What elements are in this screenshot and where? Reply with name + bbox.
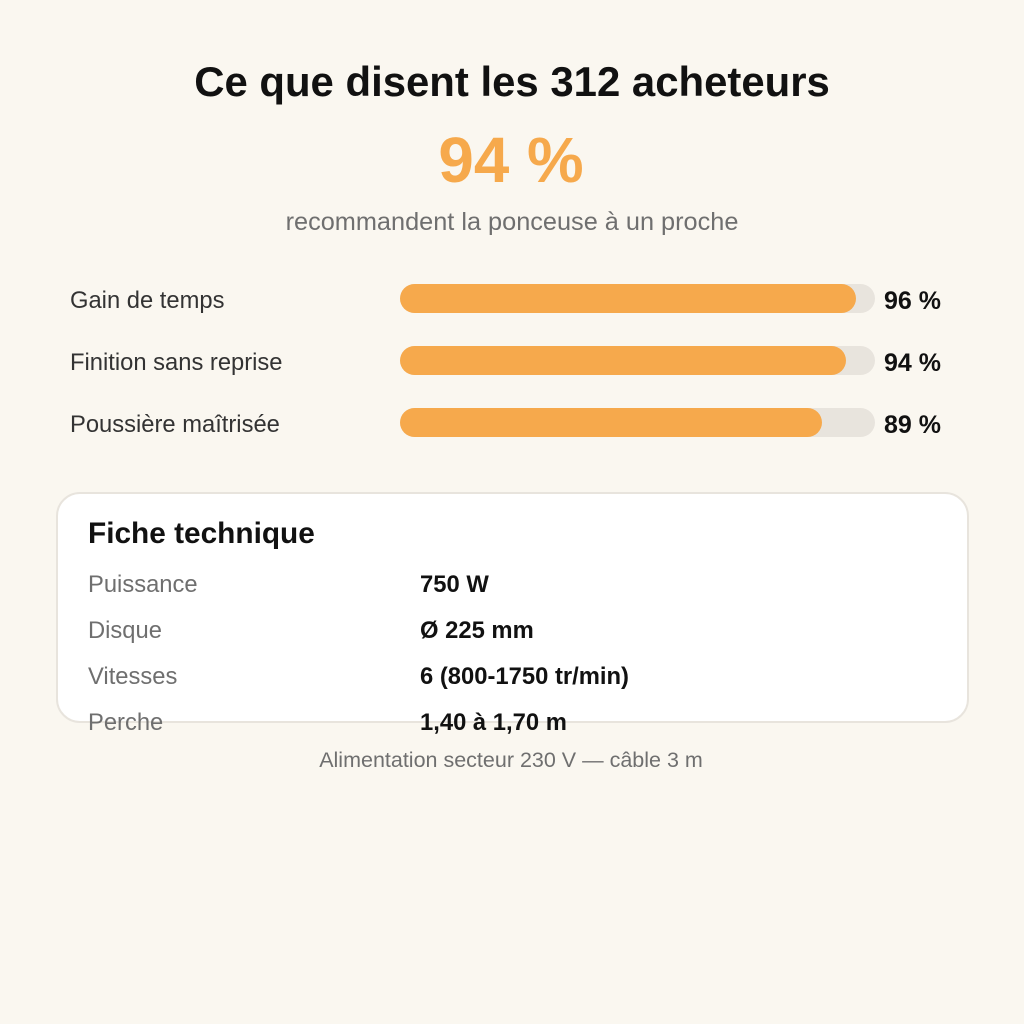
spec value: disque: Ø 225 mm [420,617,534,644]
bar track and fill [400,346,875,375]
label: Poussière maîtrisée [70,411,280,438]
stat caption: recommandent la ponceuse à un proche [286,208,738,236]
spec label: vitesses: Vitesses [88,663,177,690]
panel: fiche technique [56,492,969,723]
value: 89 % [884,411,941,439]
spec value: vitesses: 6 (800-1750 tr/min) [420,663,629,690]
footnote: Alimentation secteur 230 V — câble 3 m [319,748,703,772]
spec value: perche: 1,40 à 1,70 m [420,709,567,736]
bar track and fill [400,408,875,437]
headline stat: 94 %: 94 % [438,125,584,196]
spec value: puissance: 750 W [420,571,489,598]
label: Gain de temps [70,287,224,314]
bar track and fill [400,284,875,313]
bar row: finition sans reprise [70,346,941,377]
panel heading: Fiche technique [88,517,315,550]
spec label: puissance: Puissance [88,571,198,598]
title: Ce que disent les 312 acheteurs [194,58,830,105]
spec rows [88,571,629,736]
spec label: disque: Disque [88,617,162,644]
bar row: poussière maîtrisée [70,408,941,439]
value: 94 % [884,349,941,377]
bar row: gain de temps [70,284,941,315]
value: 96 % [884,287,941,315]
label: Finition sans reprise [70,349,283,376]
spec label: perche: Perche [88,709,163,736]
